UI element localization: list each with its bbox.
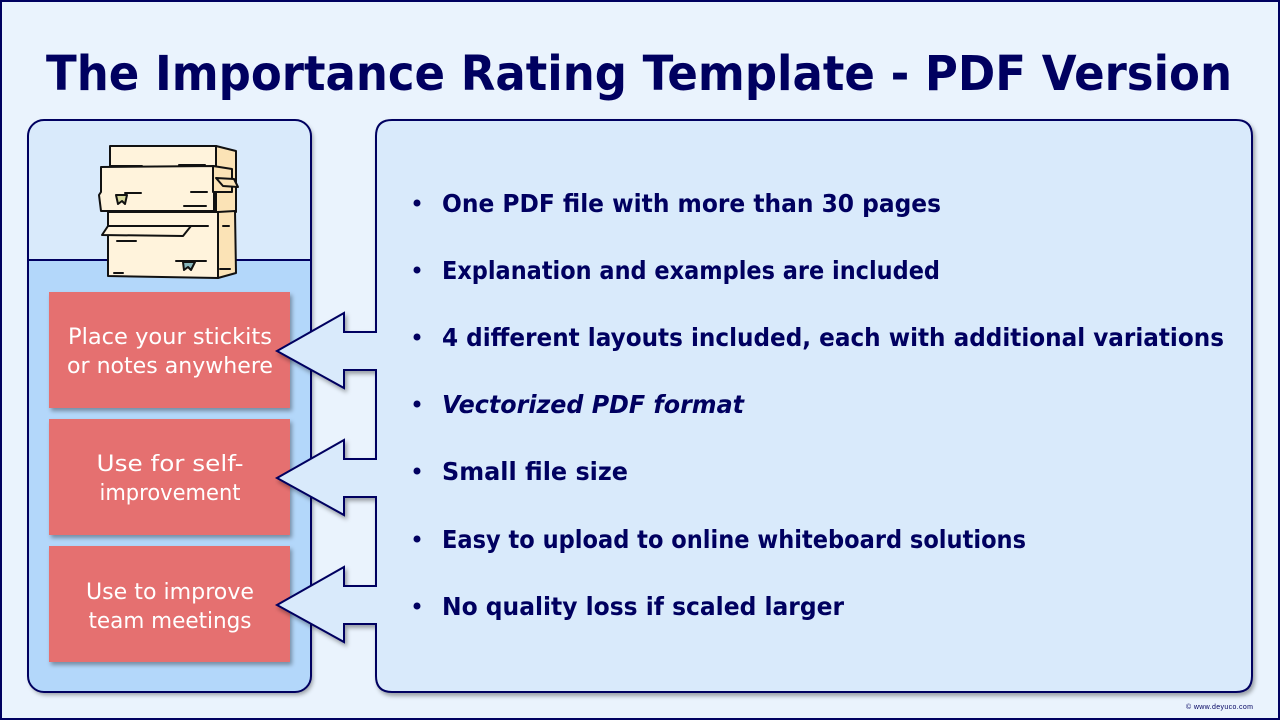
feature bullets: 4 different layouts included, each with additional variations <box>442 323 1224 352</box>
feature bullets: Vectorized PDF format <box>442 390 745 419</box>
card: team meetings: Use to improve <box>86 580 254 605</box>
feature bullets: Small file size <box>442 457 628 486</box>
title: The Importance Rating Template - PDF Version <box>46 46 1232 102</box>
card: stickits <box>49 292 290 408</box>
feature bullets: One PDF file with more than 30 pages <box>442 189 941 218</box>
card: team meetings: team meetings <box>88 609 252 634</box>
panel: left use cases <box>28 120 311 692</box>
feature bullets: Easy to upload to online whiteboard solutions <box>442 525 1026 554</box>
feature bullets <box>414 189 1224 621</box>
card: stickits: Place your stickits <box>68 325 272 350</box>
feature bullets: No quality loss if scaled larger <box>442 592 845 621</box>
feature bullets: Explanation and examples are included <box>442 256 940 285</box>
card: team meetings <box>49 546 290 662</box>
panel: right feature list with arrows <box>277 120 1252 692</box>
card: self-improvement <box>49 419 290 535</box>
card: self-improvement: improvement <box>100 481 241 506</box>
card: self-improvement: Use for self- <box>96 452 244 477</box>
icon: stack of paper notes <box>99 146 238 278</box>
copyright: © www.deyuco.com <box>1186 703 1253 711</box>
card: stickits: or notes anywhere <box>67 354 273 379</box>
